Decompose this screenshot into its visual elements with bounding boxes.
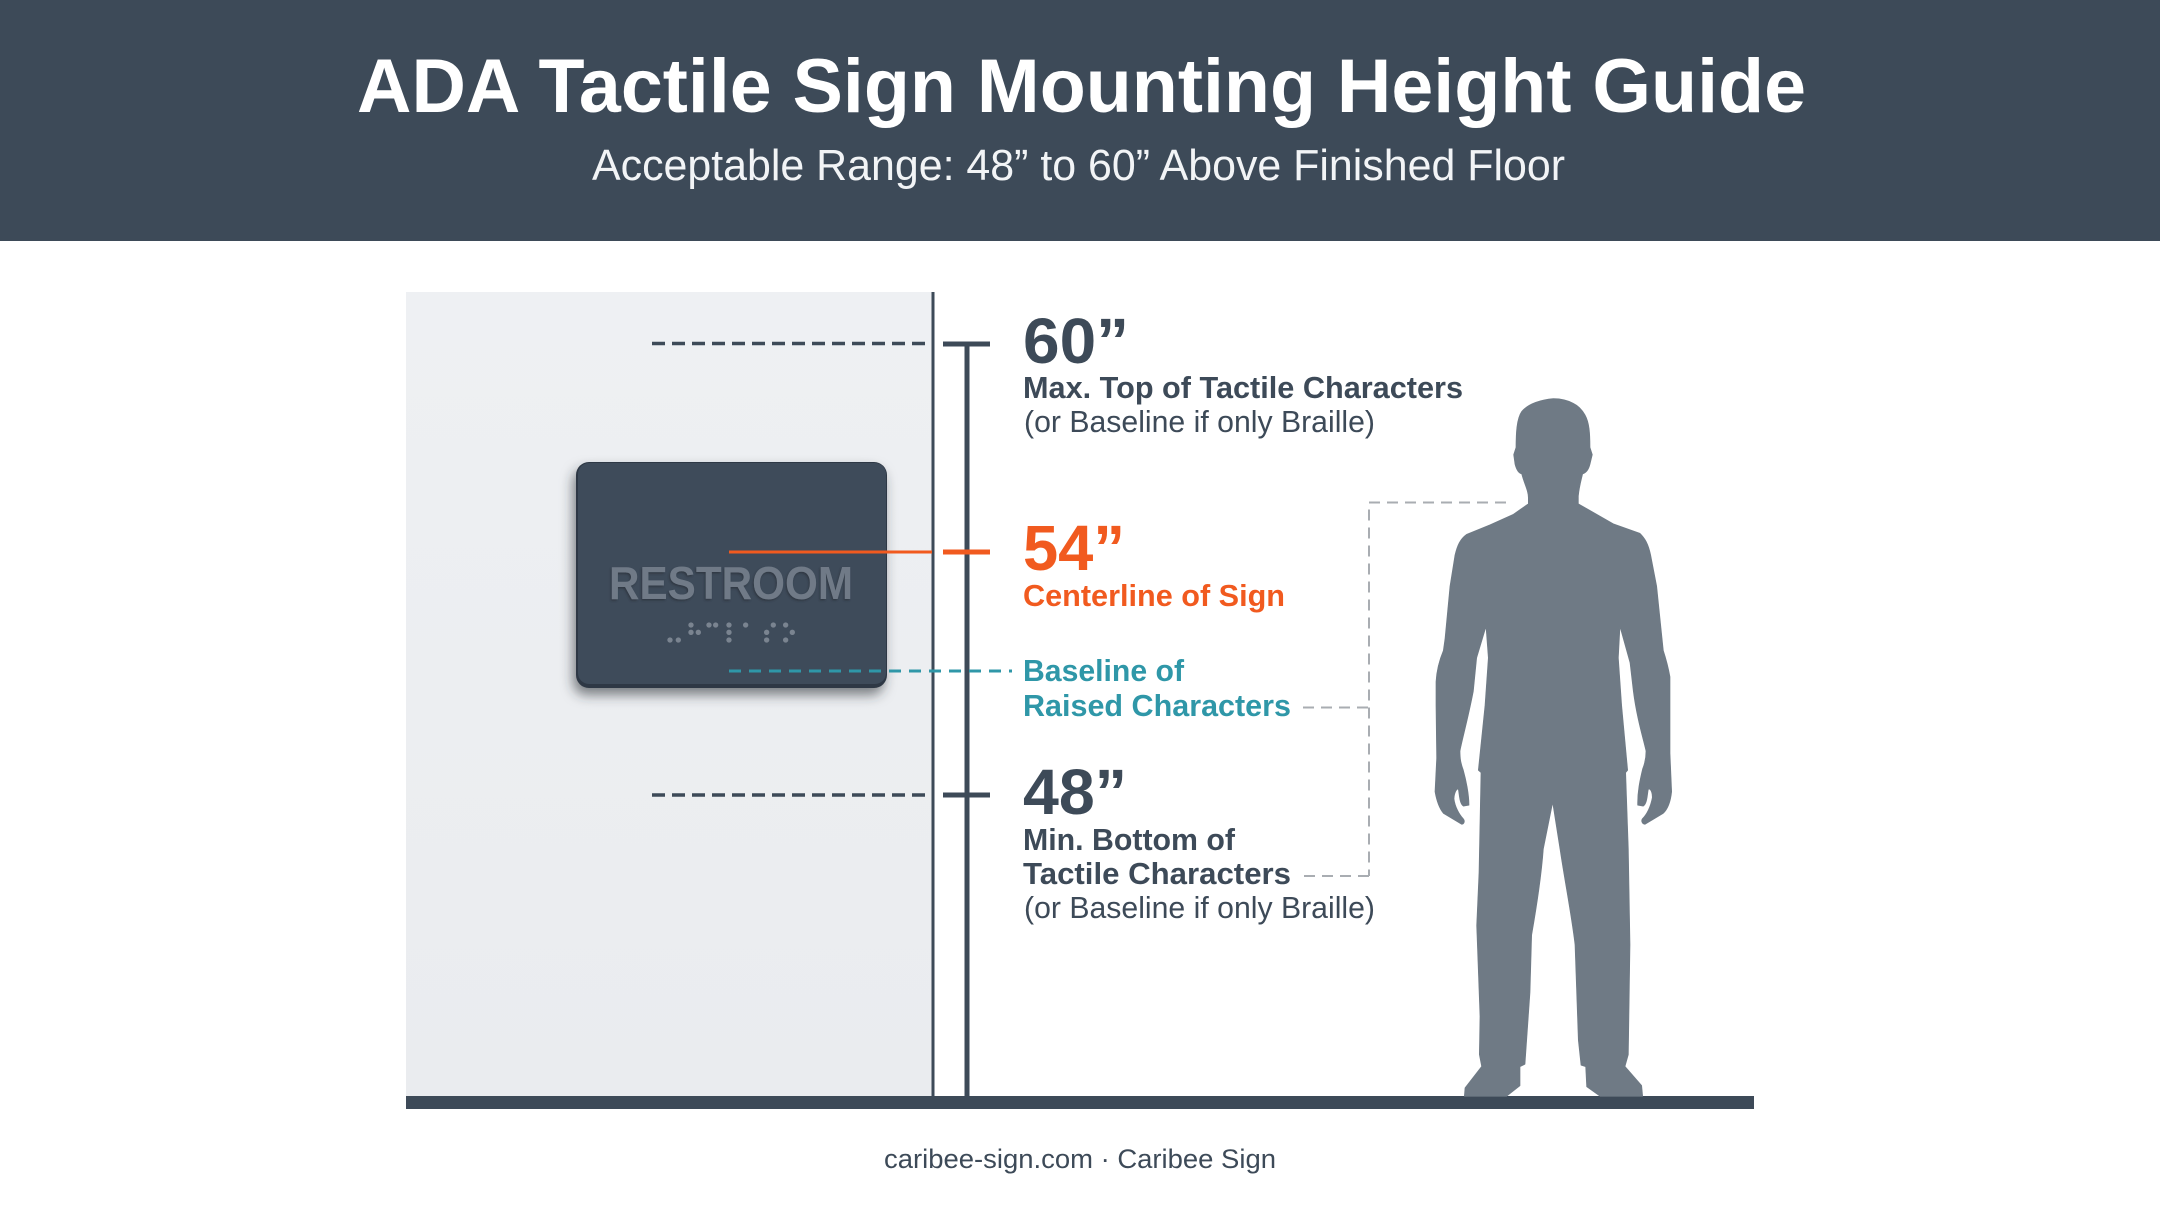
label: baseline of raised characters: Raised Characters — [1023, 688, 1291, 723]
label: baseline of raised characters — [1023, 653, 1291, 723]
label: 60 inch — [1023, 305, 1463, 439]
54 inch tick — [943, 550, 990, 554]
gray dashed connector to figure — [1303, 502, 1506, 876]
floor — [406, 1096, 1754, 1109]
label: 48 inch: Tactile Characters — [1023, 856, 1291, 891]
label: 48 inch — [1023, 756, 1375, 925]
raised characters baseline dashed line — [729, 670, 1012, 672]
panel: wall — [406, 292, 933, 1096]
sign: restroom tactile sign — [576, 462, 887, 688]
60 inch tick — [943, 342, 990, 346]
label: 60 inch: (or Baseline if only Braille) — [1024, 404, 1375, 439]
label: baseline of raised characters: Baseline of — [1023, 653, 1185, 688]
wall edge line — [932, 292, 934, 1096]
human silhouette — [1435, 399, 1672, 1096]
header band — [0, 0, 2160, 241]
vertical measuring ruler — [964, 343, 970, 1096]
54 inch centerline from sign — [729, 550, 932, 554]
braille dots — [667, 622, 795, 643]
label: 54 inch centerline: Centerline of Sign — [1023, 578, 1285, 613]
48 inch dashed reference line — [652, 793, 931, 797]
label: 48 inch: 48” — [1023, 756, 1127, 828]
raised sign text: RESTROOM — [609, 557, 853, 609]
label: 60 inch: 60” — [1023, 305, 1129, 377]
label: 60 inch: Max. Top of Tactile Characters — [1023, 370, 1463, 405]
footer credit: caribee-sign.com · Caribee Sign — [884, 1144, 1276, 1174]
subtitle: Acceptable Range: 48” to 60” Above Finished Floor — [592, 141, 1565, 190]
60 inch dashed reference line — [652, 342, 931, 345]
48 inch tick — [943, 792, 990, 798]
label: 54 inch centerline: 54” — [1023, 512, 1125, 584]
label: 54 inch centerline — [1023, 512, 1285, 613]
label: 48 inch: Min. Bottom of — [1023, 822, 1236, 857]
title: ADA Tactile Sign Mounting Height Guide — [357, 44, 1806, 129]
label: 48 inch: (or Baseline if only Braille) — [1024, 890, 1375, 925]
